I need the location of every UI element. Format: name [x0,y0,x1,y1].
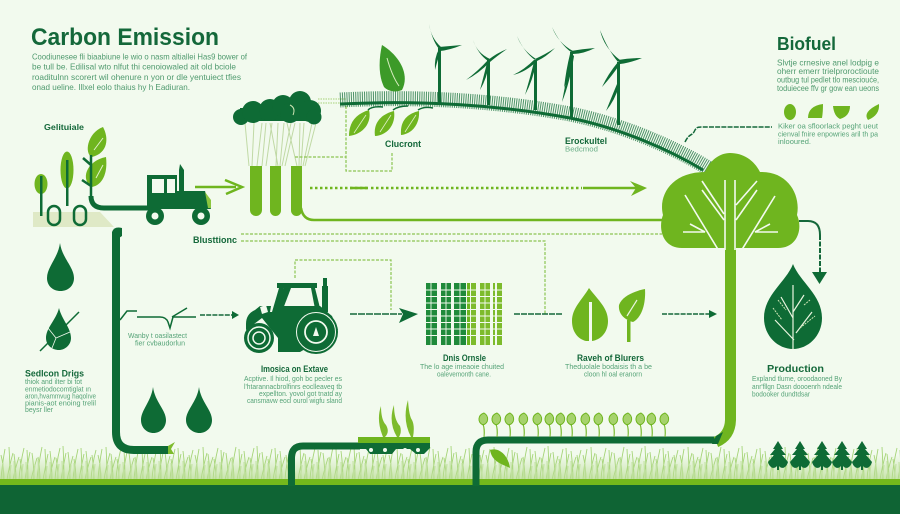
data bars caption: oalevemonth cane. [437,370,491,378]
intro text: roaditulnn scorert wil ohenure n yon or dle yentuiect tfies [32,72,241,82]
seedling row [479,413,669,437]
Biofuel text: toduiecee ffv gr gow ean ueons [777,83,879,93]
canopy and tubes [233,91,322,216]
pipe: tree trunk to ground [476,240,730,486]
tree [661,153,799,264]
big tractor [244,278,338,354]
grass strip [0,445,900,514]
Biofuel text: outbug tul pedlet tlo mesciouće, [777,74,879,84]
Sedlcon Drigs text [25,377,96,414]
Sedlcon Drigs text: thiok and ilter bi tot [25,377,83,386]
arrow: tree to production [799,221,827,284]
label: Dnis Ornsle: Dnis Ornsle [443,353,486,364]
icon: drop with leaf line [40,308,79,351]
data bars caption [420,362,504,378]
arrow to data bars [350,308,418,323]
arrow: tractor to tubes [195,180,242,194]
icon: process line [120,308,196,328]
Production text: Expland tlume, oroodaoned By [752,374,842,383]
icon: drop 1 [47,243,74,291]
data bars [426,283,502,345]
Biofuel text [777,58,879,93]
leaves caption: cloon hl oal eranorn [584,370,642,378]
Sedlcon Drigs text: enmetiodocomtiglat ın [25,384,91,394]
process line caption: fier cvbaudorlun [135,338,185,348]
wind turbines [429,24,642,125]
three small leaves [349,106,433,136]
small tractor [146,164,211,225]
dashed arrow to big tractor [200,311,239,319]
Biofuel note: inlooured. [778,137,811,146]
dash to leaves [514,313,563,315]
tractor text: cansmavw eocl ourol wigfu sland [247,396,342,405]
label: Blusttionc: Blusttionc [193,235,237,245]
intro text [32,52,248,92]
Production text: anr'fllgn Dasn doooenrh ndeale [752,382,842,391]
process line caption [128,331,188,348]
label: Sedlcon Drigs: Sedlcon Drigs [25,368,84,380]
intro text: onad ueline. Illxel eolo thaius hy h Eadiuran. [32,82,190,92]
label: Production: Production [767,364,824,375]
Biofuel note: Kiker oa sfloorlack peght ueut [778,122,879,130]
tractor text [244,374,342,405]
intro text: be tull be. Edilisal wto nlfut thi cenoiowaled ait old bciole [32,62,236,72]
flame platform [358,400,430,454]
tractor text: Acptive. Il hiod, goh bc pecler es [244,374,342,383]
label: Erockultel: Erockultel [565,136,607,146]
label: Erockultel: Bedcmod [565,146,598,154]
intro text: Coodiunesee fli biaabiune le wio o nasm altiallei Has9 bower of [32,52,248,62]
title: Carbon Emission [31,24,219,51]
leaves caption: Theduolale bodaisis th a be [565,362,652,371]
large leaf [380,45,405,100]
Biofuel note [778,122,879,146]
leaves caption [565,362,652,378]
Sedlcon Drigs text: beysr ller [25,405,53,414]
lime connector to tree [301,208,664,220]
dotted arrow to tree [310,181,647,196]
dashed arrow to tree trunk [662,310,717,318]
Biofuel text: oherr emerr trielproroctioute [777,66,879,76]
label: Imosica on Extave: Imosica on Extave [261,364,328,375]
icon: two leaves [572,288,645,342]
tractor text: l'htarannacbrolfinrs eoclleaveq tb [244,382,342,391]
Production text: bodooker dundtdsar [752,390,810,398]
Biofuel text: Slvtje crnesive anel lodpig e [777,58,879,68]
dark pipe: left loop [112,228,175,454]
icon: ground leaf [490,449,510,468]
dashed leader to Biofuel notes [685,127,772,142]
icon: leaf drop [764,264,822,349]
drops pair [141,387,212,433]
hatched ridge [340,99,708,170]
plants and capsules [33,127,150,227]
data bars caption: The lo age imeaoie chuited [420,362,504,371]
label: Erockultel [565,136,607,154]
label: Gelituiale: Gelituiale [44,122,84,132]
Production text [752,374,842,398]
dashed connectors [241,99,662,314]
label: Raveh of Blurers: Raveh of Blurers [577,353,644,364]
tractor text: expellton. yovol got tnatd ay [259,389,342,398]
process line caption: Wanby t oasilastect [128,331,188,340]
label: Clucront: Clucront [385,139,421,149]
Sedlcon Drigs text: pianis-aot enoing trelil [25,398,96,408]
pine trees [768,441,872,470]
Sedlcon Drigs text: aron,hvammvug haqolıve [25,392,96,400]
Biofuel leaf icons [784,104,879,120]
lower dark pipe [292,446,360,486]
Biofuel heading: Biofuel [777,34,836,54]
Biofuel note: cienval fnire enpowries aril th pa [778,130,879,138]
